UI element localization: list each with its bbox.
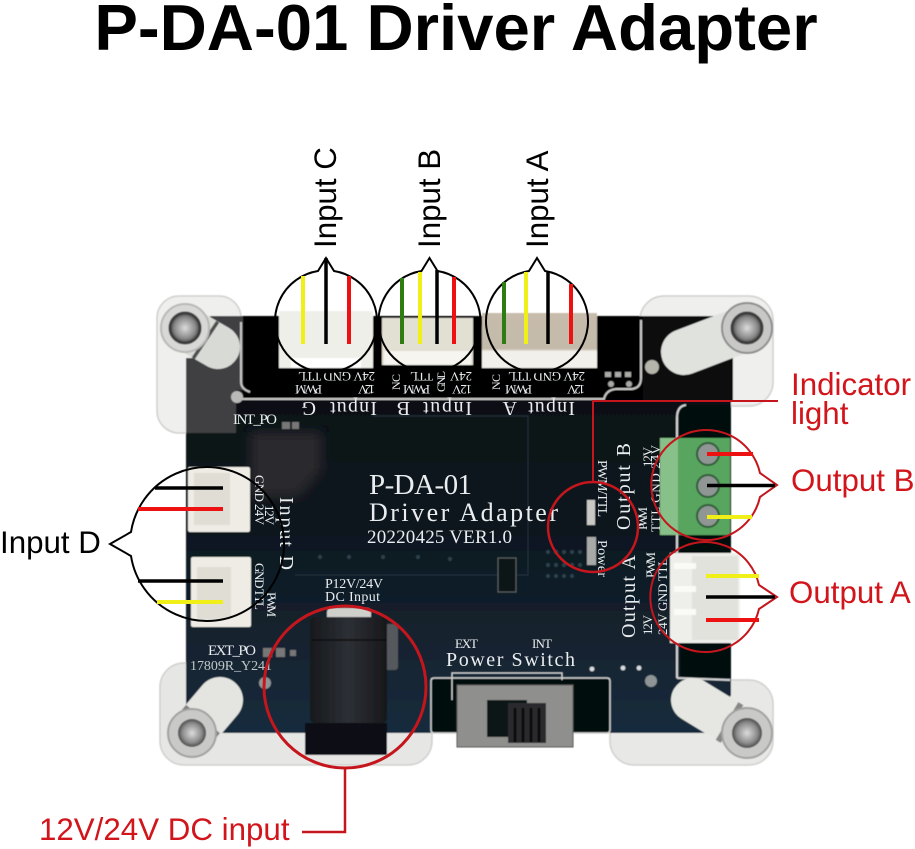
board silkscreen: name: Driver Adapter — [369, 498, 558, 527]
LEDs — [587, 500, 596, 565]
terminal block output B — [660, 438, 730, 535]
board silkscreen: connector labels: PWM — [643, 552, 658, 578]
switch cutout fill — [431, 678, 610, 733]
connector output A — [670, 553, 740, 643]
board silkscreen: connector labels: GND TTL — [252, 563, 267, 610]
board silkscreen: connector labels: PWM/TTL — [594, 460, 609, 517]
board silkscreen: connector labels: Power Switch — [446, 649, 575, 671]
top right black area — [644, 317, 733, 401]
board silkscreen: connector labels: TTL GND 24V — [648, 444, 663, 532]
label: input A: Input A — [520, 150, 555, 248]
label: indicator light: light — [791, 396, 849, 431]
board silkscreen: connector labels: Power — [594, 540, 609, 577]
input D connector lower — [191, 557, 251, 627]
mounting holes — [231, 360, 659, 689]
board silkscreen: name: 20220425 VER1.0 — [367, 527, 512, 548]
small parts on board — [263, 372, 632, 657]
label: input B: Input B — [412, 149, 447, 248]
standoff bottom right — [693, 700, 772, 758]
board silkscreen: connector labels: Input — [423, 397, 472, 419]
callout: input B — [379, 258, 480, 372]
board silkscreen: connector labels: A — [502, 397, 517, 419]
board silkscreen: connector labels: Input — [330, 397, 377, 419]
board silkscreen: connector labels: 24V — [449, 369, 472, 384]
board silkscreen: connector labels: G — [302, 397, 316, 419]
input A connector — [482, 313, 597, 368]
board silkscreen: connector labels: DC Input — [325, 590, 380, 605]
board silkscreen: name — [367, 469, 558, 548]
board silkscreen: connector labels: Input — [528, 397, 575, 419]
board photo — [157, 296, 773, 765]
board silkscreen: connector labels: 24V GND TTL — [298, 369, 375, 384]
board silkscreen: name: P-DA-01 — [369, 469, 472, 501]
board silkscreen: connector labels — [190, 369, 670, 674]
grey patch on board — [250, 432, 322, 497]
label: output B: Output B — [791, 463, 915, 498]
board silkscreen: connector labels: TTL — [410, 369, 433, 384]
right connector section — [680, 405, 731, 678]
input D connector upper — [188, 467, 250, 532]
callout: input A — [486, 258, 588, 372]
standoff top left — [161, 304, 218, 352]
acrylic corner: top right — [640, 296, 773, 406]
callout: output A — [650, 542, 777, 652]
standoff bottom left — [168, 700, 220, 757]
board silkscreen: connector labels: NC — [489, 374, 503, 390]
label: input C: Input C — [308, 147, 343, 248]
acrylic corner: top left — [157, 296, 241, 433]
label: output A: Output A — [789, 575, 911, 610]
label: DC input: 12V/24V DC input — [39, 812, 290, 847]
callout: indicator light — [548, 401, 778, 572]
board silkscreen: connector labels: 17809R_Y241 — [190, 659, 272, 674]
board silkscreen: connector labels: 12V — [262, 505, 277, 526]
label: indicator light: Indicator — [791, 367, 911, 402]
board silkscreen: connector labels: NC — [389, 374, 403, 390]
via dots — [318, 550, 582, 578]
board silkscreen: connector labels: GND 24V — [252, 475, 267, 526]
input B connector — [382, 318, 473, 365]
callout: input D — [110, 467, 284, 621]
acrylic corner: bottom left — [160, 663, 432, 765]
board silkscreen: connector labels: Output B — [613, 443, 635, 530]
board silkscreen: connector labels: 12V — [640, 446, 655, 467]
callout: output B — [651, 430, 777, 540]
acrylic corner: bottom right — [610, 680, 773, 765]
board silkscreen: connector labels: Input D — [275, 497, 297, 570]
board silkscreen: connector labels: GND — [434, 370, 448, 392]
slide switch — [457, 685, 573, 747]
callout: input C — [275, 258, 377, 372]
board silkscreen: connector labels: PWM — [505, 382, 532, 397]
label: input D: Input D — [0, 525, 101, 560]
component: small regulator — [498, 558, 516, 592]
board silkscreen: connector labels: Output A — [618, 554, 640, 638]
DC jack — [305, 608, 398, 755]
board silkscreen: connector labels: INT_PO — [233, 412, 277, 428]
callout: DC input — [264, 606, 426, 832]
standoff top right — [684, 303, 772, 353]
header notch area — [243, 316, 643, 400]
input C connector — [279, 311, 373, 368]
board silkscreen: connector labels: 12V — [566, 382, 585, 397]
board silkscreen: connector labels: EXT — [455, 636, 478, 651]
circuit board — [186, 316, 733, 733]
board silkscreen: connector labels: 24V GND TTL — [655, 558, 670, 635]
board silkscreen: connector labels: 12V — [357, 382, 375, 397]
board silkscreen: connector labels: B — [397, 397, 410, 419]
board silkscreen: connector labels: 12V — [640, 614, 655, 635]
white board edge trace — [236, 320, 641, 399]
white dots — [590, 666, 641, 671]
inner pcb outline — [295, 416, 528, 575]
board silkscreen: connector labels: 24V GND TTL — [508, 369, 585, 384]
board silkscreen: connector labels: 12V — [451, 382, 472, 397]
board silkscreen: connector labels: PWM — [264, 592, 279, 617]
board silkscreen: connector labels: INT — [532, 636, 552, 651]
board silkscreen: connector labels: PWM — [635, 507, 650, 530]
board silkscreen: connector labels: PWM — [295, 382, 322, 397]
acrylic tint over board — [186, 316, 243, 433]
board silkscreen: connector labels: P12V/24V — [325, 577, 383, 592]
board silkscreen: connector labels: PWM — [403, 382, 430, 397]
board silkscreen: connector labels: EXT_PO — [208, 643, 256, 659]
